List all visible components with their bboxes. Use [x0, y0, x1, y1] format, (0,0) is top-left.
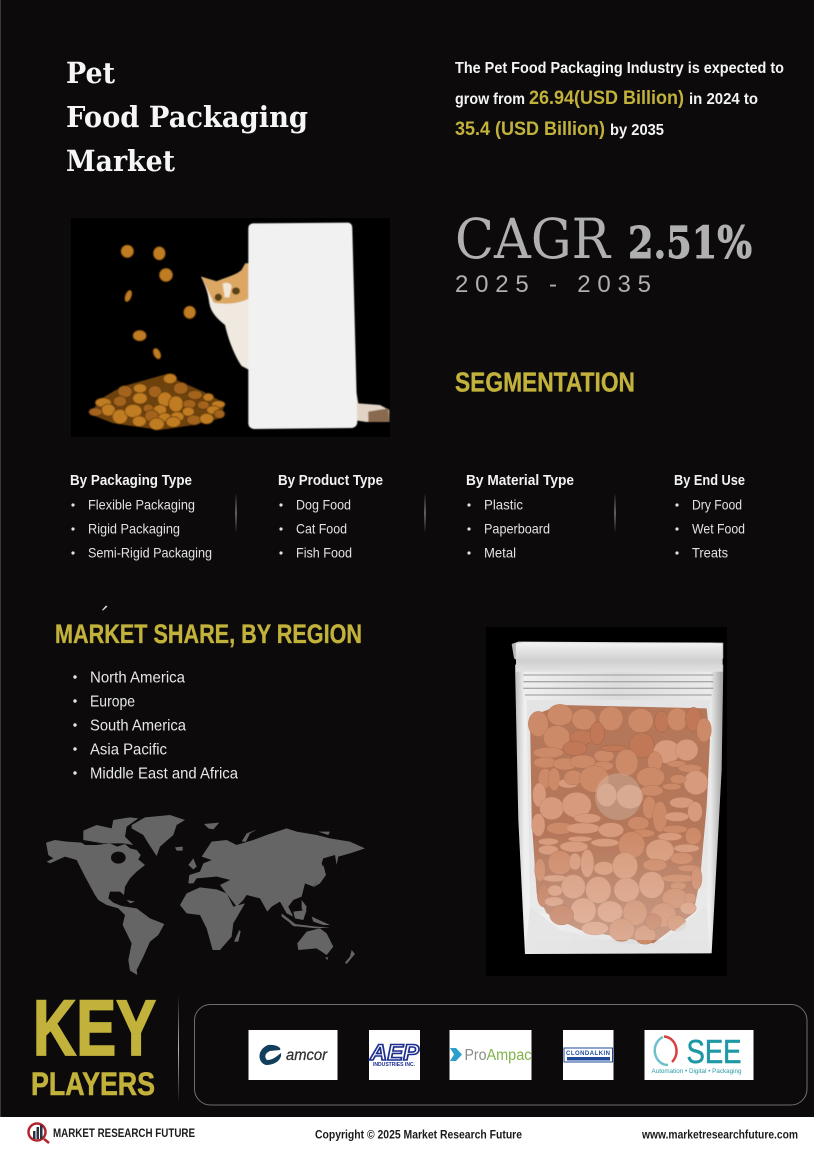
world map: [46, 815, 365, 975]
segmentation column: by material type: Paperboard: [484, 520, 550, 536]
segmentation column: by product type: Dog Food: [296, 496, 351, 512]
segmentation column: by material type: By Material Type: [466, 472, 574, 489]
segmentation column: by end use: [674, 472, 745, 560]
footer brand name: MARKET RESEARCH FUTURE: [53, 1126, 195, 1140]
segmentation column: by packaging type: By Packaging Type: [70, 472, 192, 489]
biscuits: [528, 704, 711, 944]
segmentation column: by material type: [466, 472, 574, 560]
logo: AEP Industries: [369, 1030, 420, 1080]
logo: amcor: amcor: [286, 1047, 328, 1064]
logo: amcor: [248, 1030, 338, 1080]
logo: SEE: SEE: [686, 1033, 742, 1070]
segmentation column: by end use: Treats: [692, 544, 728, 560]
footer bar: [0, 1117, 814, 1150]
logo: ProAmpac: Ampac: [486, 1047, 532, 1064]
region list: Middle East and Africa: [90, 766, 238, 782]
logo: ProAmpac: Pro: [464, 1047, 486, 1064]
title: [66, 56, 308, 178]
segmentation column: by product type: Fish Food: [296, 544, 352, 560]
market forecast text block: by 2035: [610, 122, 664, 139]
title: Pet: [66, 56, 116, 90]
region list: North America: [90, 670, 185, 686]
market forecast text block: 35.4 (USD Billion): [455, 118, 605, 140]
market forecast text block: grow from: [455, 91, 525, 108]
segmentation column: by material type: Metal: [484, 544, 516, 560]
segmentation column: by packaging type: Rigid Packaging: [88, 520, 180, 536]
segmentation column: by packaging type: Flexible Packaging: [88, 496, 195, 512]
key players heading: KEY: [33, 983, 156, 1072]
CAGR callout: 2.51%: [628, 218, 752, 269]
logo: ProAmpac: [450, 1030, 532, 1080]
market forecast text block: 26.94(USD Billion): [529, 87, 684, 109]
title: Market: [66, 144, 176, 178]
market forecast text block: in 2024 to: [689, 91, 758, 108]
image: cat with white pouch and kibble: [71, 218, 390, 437]
segmentation column: by end use: Wet Food: [692, 520, 745, 536]
heading: market share by region: MARKET SHARE, BY REGION: [55, 619, 362, 649]
heading: segmentation: SEGMENTATION: [455, 366, 635, 398]
region list: Europe: [90, 694, 135, 710]
segmentation column: by packaging type: [70, 472, 212, 560]
falling kibble: [121, 245, 196, 360]
key players heading: PLAYERS: [31, 1066, 155, 1102]
logo: AEP Industries: INDUSTRIES INC.: [373, 1062, 415, 1068]
kibble pile: [89, 374, 225, 430]
region list: South America: [90, 718, 186, 734]
CAGR callout: [455, 207, 752, 298]
market forecast text block: The Pet Food Packaging Industry is expected to: [455, 60, 784, 77]
logo: Clondalkin: [563, 1030, 614, 1080]
segmentation column: by product type: By Product Type: [278, 472, 383, 489]
icon: market research future logo: [28, 1124, 49, 1143]
market forecast text block: [455, 60, 784, 140]
region list: [73, 670, 238, 782]
logo: Clondalkin: CLONDALKIN: [566, 1051, 610, 1057]
logo: SEE: [644, 1030, 754, 1080]
CAGR callout: 2025 - 2035: [455, 271, 651, 298]
region list: Asia Pacific: [90, 742, 167, 758]
panel: key player logos: [194, 1004, 807, 1105]
image: transparent pouch of biscuits: [486, 627, 727, 976]
segmentation column: by product type: Cat Food: [296, 520, 347, 536]
key players heading: [31, 983, 156, 1102]
title: Food Packaging: [66, 100, 308, 134]
segmentation column: by product type: [278, 472, 383, 560]
segmentation column: by end use: Dry Food: [692, 496, 742, 512]
cat tail and paw: [353, 373, 389, 422]
segmentation column: by end use: By End Use: [674, 472, 745, 489]
CAGR callout: CAGR: [455, 207, 611, 271]
logo: AEP Industries: AEP: [369, 1040, 419, 1065]
logo: SEE: Automation • Digital • Packaging: [652, 1068, 742, 1075]
pouch body: [512, 642, 723, 954]
footer copyright: Copyright © 2025 Market Research Future: [315, 1128, 522, 1142]
white pouch: [248, 223, 357, 429]
cat head and body: [201, 263, 249, 370]
segmentation column: by packaging type: Semi-Rigid Packaging: [88, 544, 212, 560]
segmentation column: by material type: Plastic: [484, 496, 523, 512]
